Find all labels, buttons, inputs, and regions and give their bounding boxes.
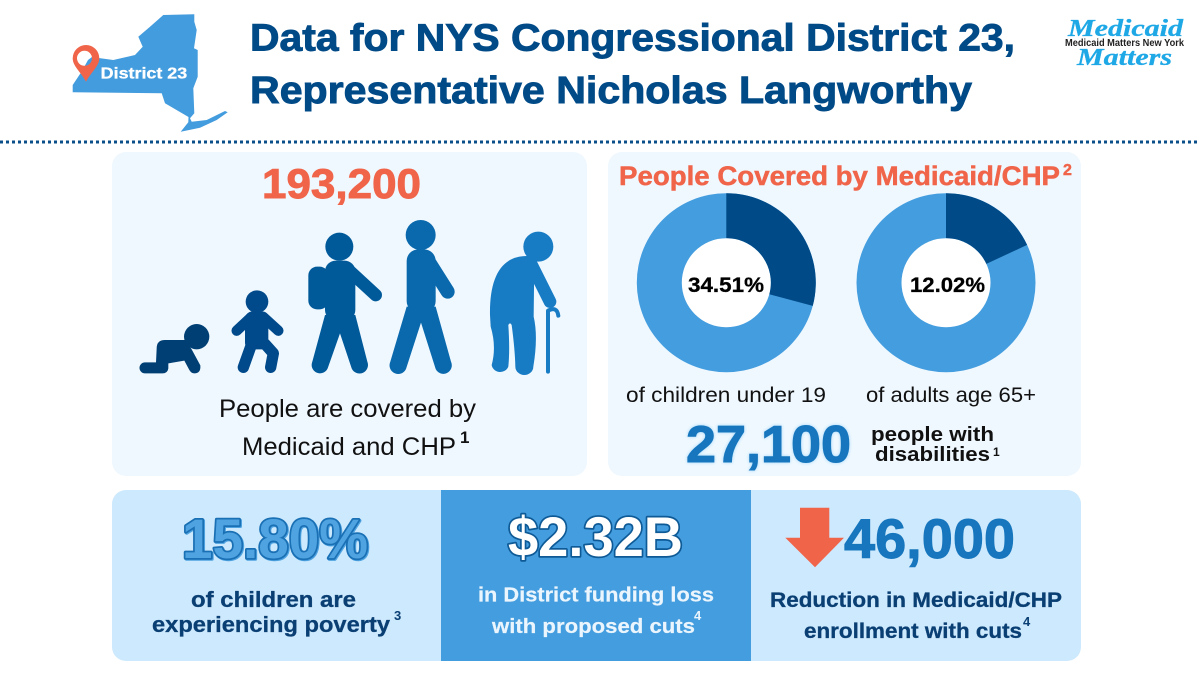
icon: person with backpack (308, 233, 376, 374)
people with disabilities label: disabilities (875, 444, 990, 466)
stat: funding loss: 4 (694, 608, 702, 623)
stat: enrollment reduction (770, 507, 1062, 643)
coverage description: Medicaid and CHP (242, 433, 456, 461)
donut label: children: of children under 19 (626, 384, 826, 407)
panel heading: People Covered by Medicaid/CHP (619, 161, 1060, 191)
title: Representative Nicholas Langworthy (250, 70, 972, 112)
stat: child poverty: 15.80% (182, 507, 368, 570)
panel heading: 2 (1063, 162, 1072, 179)
coverage description: People are covered by (219, 395, 477, 423)
stat: enrollment reduction: 46,000 (844, 507, 1015, 570)
map label: District 23 (101, 66, 187, 82)
map of New York State (73, 14, 228, 132)
panel: people covered total (112, 152, 587, 476)
stat: enrollment reduction: Reduction in Medicaid/CHP (770, 589, 1062, 612)
icon: older adult with cane (490, 232, 558, 375)
total covered number: 193,200 (262, 160, 421, 207)
logo: Medicaid Matters New York: Medicaid Matters New York (1065, 38, 1184, 49)
donut chart: children under 19 (637, 193, 816, 372)
icon: crawling baby (139, 324, 209, 373)
stat: child poverty: 3 (394, 608, 401, 623)
coverage description: 1 (460, 428, 469, 447)
coverage description (219, 395, 477, 461)
donut chart: adults 65+ (856, 193, 1036, 372)
logo: Medicaid Matters New York: Matters (1076, 45, 1172, 71)
panel: people covered by Medicaid/CHP (608, 152, 1081, 476)
stat: child poverty: experiencing poverty (152, 612, 391, 637)
stat: child poverty: of children are (191, 587, 356, 612)
icon: people of all ages (139, 220, 558, 375)
people with disabilities label: people with (871, 424, 994, 446)
stat: enrollment reduction: enrollment with cuts (804, 620, 1022, 643)
people with disabilities number: 27,100 (686, 416, 851, 474)
title (250, 18, 1015, 112)
logo: Medicaid Matters New York: Medicaid (1067, 16, 1184, 42)
people with disabilities label: 1 (993, 445, 1000, 459)
icon: New York State map with District 23 pin (73, 14, 228, 132)
donut chart: adults 65+: 12.02% (910, 274, 985, 297)
panel: bottom statistics band (112, 490, 1081, 661)
people with disabilities label (871, 424, 1000, 466)
stat: funding loss: $2.32B (508, 505, 683, 568)
icon: toddler (237, 290, 278, 367)
stat: funding loss: with proposed cuts (491, 616, 695, 638)
stat: funding loss: in District funding loss (478, 584, 714, 606)
map pin (73, 45, 99, 82)
donut label: adults: of adults age 65+ (866, 384, 1036, 407)
stat: child poverty (152, 507, 401, 637)
logo: Medicaid Matters New York (1065, 16, 1184, 71)
title: Data for NYS Congressional District 23, (250, 18, 1015, 60)
icon: walking adult (390, 220, 452, 374)
stat: funding loss (441, 490, 751, 661)
arrow: down (785, 508, 844, 567)
stat: enrollment reduction: 4 (1023, 614, 1031, 629)
donut chart: children under 19: 34.51% (688, 274, 764, 297)
